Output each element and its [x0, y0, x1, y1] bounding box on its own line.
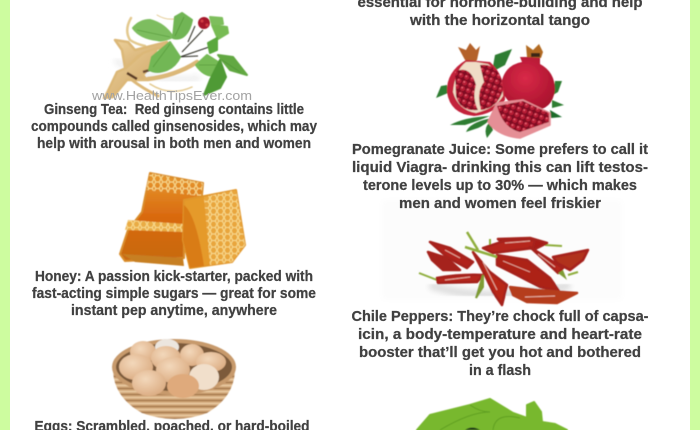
icon: honeycomb [120, 173, 245, 268]
left green side bar [0, 0, 10, 430]
text: honey description [32, 268, 316, 319]
icon: ginseng root and leaves [104, 13, 247, 98]
text: ginseng description: help with arousal in both men and women [37, 135, 311, 152]
text: honey description: fast-acting simple sugars — great for some [32, 285, 316, 302]
panel: chile peppers [352, 232, 648, 379]
text: pomegranate description: Pomegranate Juice: Some prefers to call it [352, 141, 648, 158]
text: pomegranate description: liquid Viagra- drinking this can lift testos- [352, 159, 648, 176]
text: pomegranate description: terone levels up to 30% — which makes [363, 177, 637, 194]
text: chile description: icin, a body-temperature and heart-rate [358, 326, 642, 343]
text: ginseng description [31, 101, 318, 152]
panel: ginseng tea [31, 13, 318, 152]
panel: eggs [34, 339, 310, 430]
text: chile description: in a flash [469, 362, 531, 379]
panel: pomegranate juice [352, 43, 648, 212]
text: honey description: Honey: A passion kick-starter, packed with [35, 268, 313, 285]
text: chile description: Chile Peppers: They’re chock full of capsa- [352, 308, 648, 325]
panel: hormone text continuation [358, 0, 642, 29]
icon: basket of eggs [113, 339, 235, 419]
text: ginseng description: Ginseng Tea: Red ginseng contains little [44, 101, 304, 118]
icon: pomegranates [436, 43, 564, 138]
icon: green basil leaves [417, 399, 567, 430]
right green side bar [690, 0, 700, 430]
icon: red chile peppers [419, 232, 588, 305]
text: honey description: instant pep anytime, anywhere [71, 302, 277, 319]
text: chile description: booster that’ll get you hot and bothered [359, 344, 641, 361]
pepper photo backdrop [382, 200, 622, 300]
text: ginseng description: compounds called ginsenosides, which may [31, 118, 318, 135]
watermark: www.HealthTipsEver.com [91, 89, 252, 103]
text: pomegranate description [352, 141, 648, 212]
panel: hormone text continuation: with the horizontal tango [409, 12, 590, 29]
panel: honey [32, 173, 316, 319]
text: pomegranate description: men and women feel friskier [399, 195, 601, 212]
text: chile description [352, 308, 648, 379]
